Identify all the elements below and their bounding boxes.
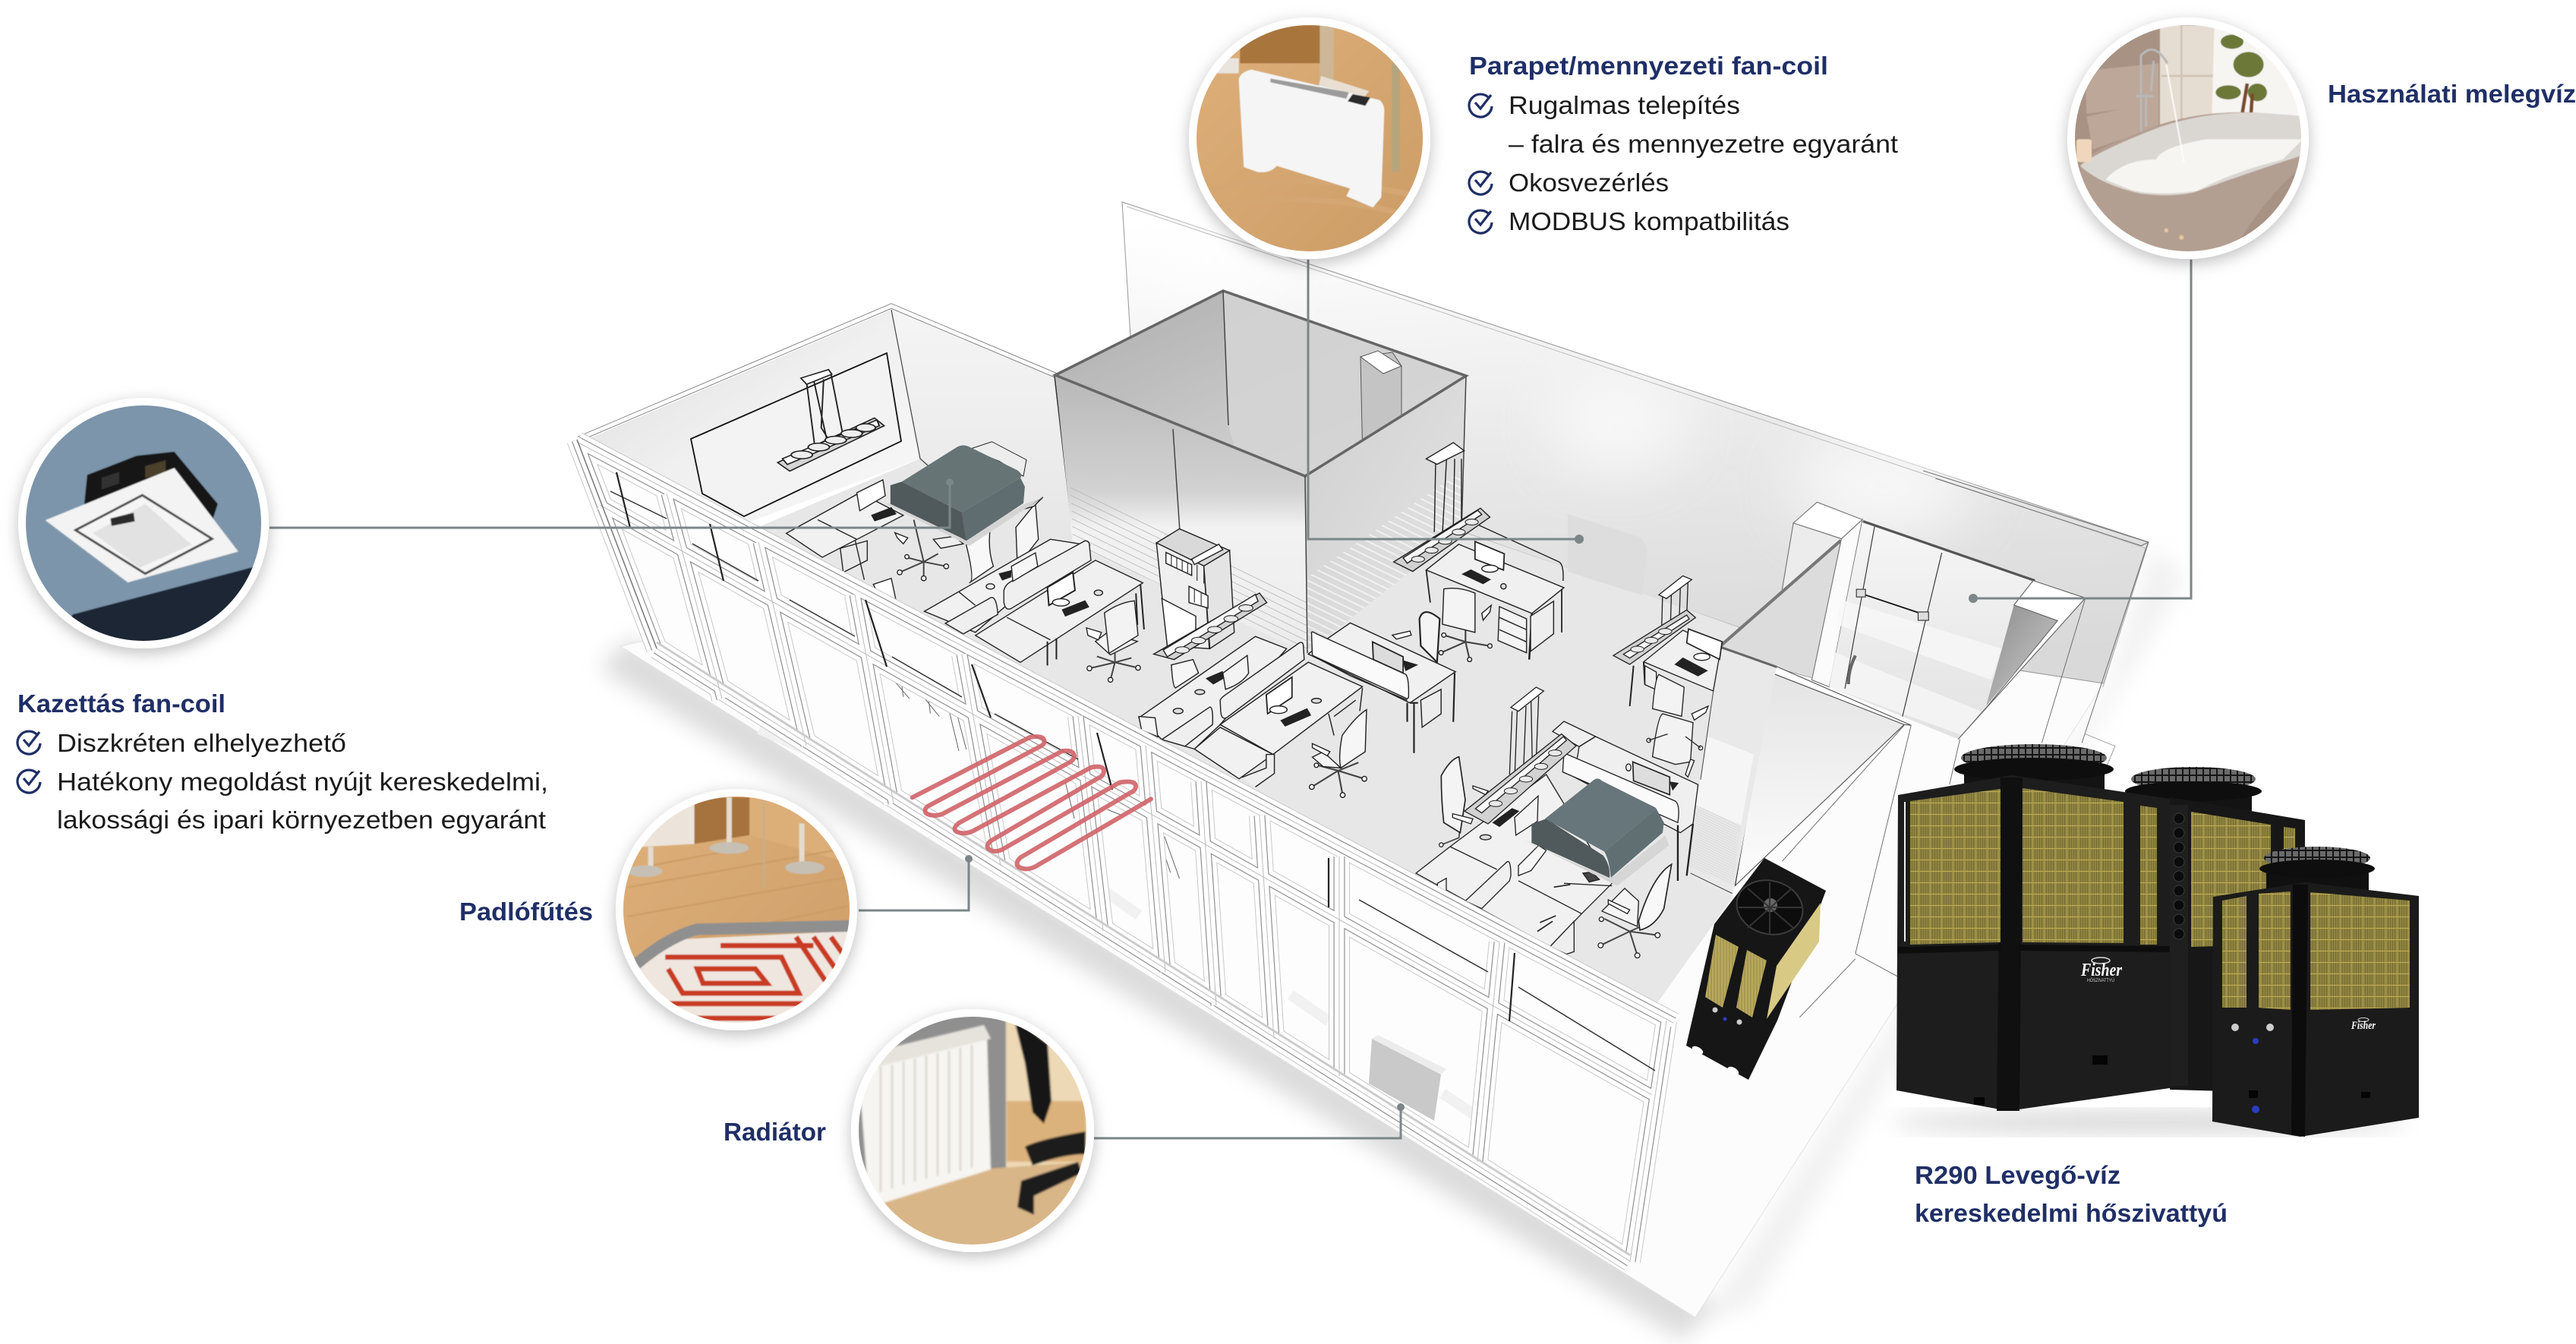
back wall (1122, 202, 2149, 683)
item 1 continuation: – falra és mennyezetre egyaránt (1509, 130, 1898, 158)
rear heat pump (2125, 767, 2305, 1093)
Fisher logo large (2080, 958, 2123, 983)
chair (1089, 651, 1138, 680)
small items (1493, 809, 1518, 826)
furniture: left room and first bench (787, 442, 1144, 682)
side wall (891, 306, 1073, 544)
heat pump trio (1890, 744, 2419, 1137)
item 2 continuation: lakossági és ipari környezetben egyaránt (57, 806, 546, 834)
back piece (1553, 721, 1596, 746)
item 1: Rugalmas telepítés (1509, 91, 1740, 119)
item 2: Hatékony megoldást nyújt kereskedelmi, (57, 768, 548, 796)
glass meeting box (1055, 291, 1466, 653)
floor shadow (600, 638, 1716, 1340)
parapet unit on wall (1568, 514, 1647, 595)
chair 2 (1600, 919, 1657, 955)
heading: parapet: Parapet/mennyezeti fan-coil (1469, 52, 1828, 80)
label: heat pump: R290 Levegő-víz (1915, 1161, 2120, 1189)
upper desk (1427, 544, 1564, 614)
dark recess (1986, 605, 2057, 706)
lower desk (1194, 727, 1273, 779)
photo circle: underfloor heating (616, 789, 860, 1039)
furniture: right benches (1416, 576, 1722, 958)
chairs upper right (1653, 674, 1684, 716)
furniture: central benches (1139, 443, 1564, 797)
text block: cassette fan-coil (17, 689, 548, 834)
leader: hot water (1973, 260, 2191, 598)
main left desk (1416, 775, 1612, 947)
leader: parapet (1308, 260, 1579, 539)
white partition (1958, 581, 2086, 740)
door panel (1829, 522, 2033, 740)
chair 1 (1440, 825, 1460, 845)
small heat pump inside building (1686, 858, 1826, 1080)
item 1: Diszkréten elhelyezhető (57, 729, 346, 757)
chair behind window (873, 579, 896, 599)
radiator in front wall (1369, 1035, 1446, 1121)
whiteboard (691, 353, 901, 516)
icon: check 3 (1469, 210, 1492, 233)
ground slab (620, 532, 2149, 1317)
upper bench (924, 539, 1089, 633)
furniture seen through glass (859, 668, 1180, 879)
pillar (1793, 502, 1862, 539)
front bench (976, 560, 1143, 662)
lamp 4 (1661, 582, 1688, 638)
far chairs (1441, 629, 1490, 660)
right desk (1574, 737, 1698, 833)
small panel (1465, 862, 1511, 909)
leader lines (270, 260, 2191, 1138)
chair (900, 520, 946, 579)
front desk (1220, 662, 1363, 755)
back furniture (970, 442, 1026, 476)
label: radiator: Radiátor (724, 1118, 826, 1146)
label: heat pump: kereskedelmi hőszivattyú (1915, 1199, 2228, 1227)
item 2: Okosvezérlés (1509, 169, 1669, 197)
right bench (1308, 623, 1455, 703)
label: heat pump (1915, 1161, 2228, 1227)
leader: underfloor (859, 859, 969, 910)
Fisher logo large: Fisher (2080, 961, 2123, 980)
leader: radiator (1094, 1107, 1401, 1138)
right side shadow (1701, 547, 2187, 1321)
photo circle: parapet fan-coil (1189, 17, 1430, 259)
monitor (857, 480, 885, 511)
shelving (1156, 528, 1230, 566)
label: hot water: Használati melegvíz (2328, 80, 2576, 108)
lamp 5 (1509, 696, 1539, 780)
Fisher logo small (2351, 1017, 2376, 1032)
frame members (577, 440, 1666, 1261)
icon: check 2 (1469, 172, 1492, 194)
fan-coil box right (1524, 778, 1669, 886)
office floor (748, 459, 1739, 1006)
large heat pump (1897, 744, 2170, 1111)
photo circle: bathtub (2067, 17, 2309, 259)
bottom rail hatch (657, 642, 1630, 1255)
bathroom block (1720, 471, 2148, 1017)
upper pane dark accents (610, 491, 1655, 1071)
back wall double rim (1127, 207, 2146, 687)
side glass wall (1720, 541, 1841, 678)
back wall light pools (1146, 213, 1974, 539)
lower room (1735, 673, 1904, 885)
glazed front wall (577, 440, 1673, 1261)
end wall (591, 310, 920, 524)
item 3: MODBUS kompatbilitás (1509, 207, 1789, 235)
photo circle: cassette fan-coil (17, 393, 273, 649)
lamp 3 (1434, 459, 1461, 533)
chair middle (1312, 762, 1364, 795)
Fisher logo large: HŐSZIVATTYÚ (2087, 978, 2114, 983)
heading: cassette: Kazettás fan-coil (17, 689, 225, 718)
glass partition stripes (1688, 647, 1777, 898)
label: underfloor heating: Padlófűtés (459, 898, 593, 926)
wall rim (579, 306, 1055, 439)
building cutaway (577, 202, 2187, 1340)
upper right desk (1644, 630, 1721, 691)
pendant lamp over left room (777, 370, 884, 471)
bench 3 (1139, 636, 1287, 749)
text block: parapet fan-coil (1469, 52, 1898, 235)
leader: cassette (270, 482, 950, 528)
lamp over shelving (1154, 593, 1267, 660)
photo circle: radiator (851, 1009, 1094, 1252)
icon: check 2 (17, 770, 40, 793)
icon: check 1 (17, 731, 40, 754)
fan-coil box left (884, 445, 1043, 546)
desk by box (787, 493, 903, 557)
small heat pump (2212, 847, 2419, 1137)
underfloor heating pipe (913, 737, 1151, 869)
Fisher logo small: Fisher (2351, 1020, 2376, 1032)
icon: check 1 (1469, 94, 1492, 117)
